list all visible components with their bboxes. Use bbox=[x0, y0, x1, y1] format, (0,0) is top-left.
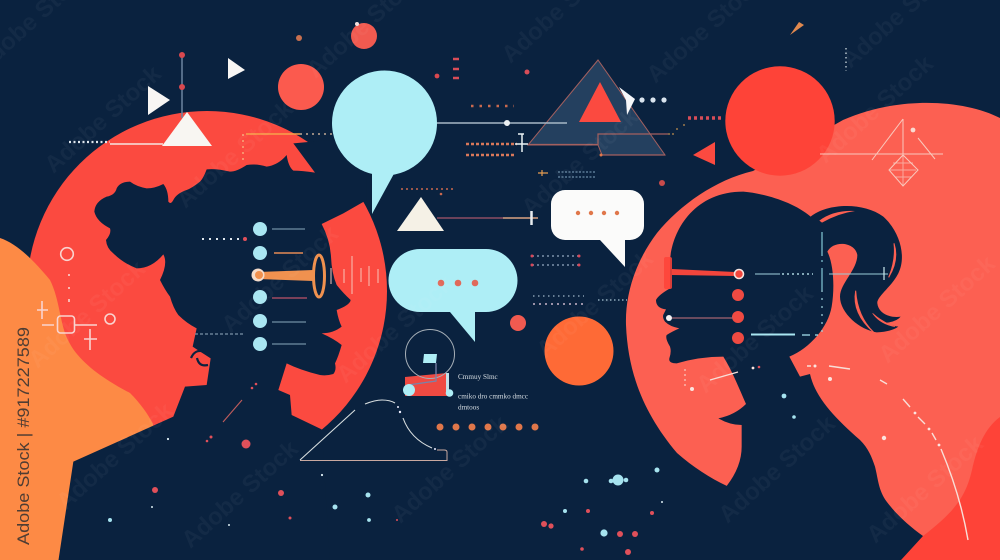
watermark: Adobe Stock repeated: Adobe Stock bbox=[713, 410, 841, 529]
left red circle bbox=[27, 111, 387, 471]
watermark: Adobe Stock repeated: Adobe Stock bbox=[873, 250, 1000, 369]
left ear crescent bbox=[191, 351, 208, 365]
dots beside triangle bbox=[639, 97, 667, 103]
panel: top triangle diagram bbox=[437, 59, 723, 186]
blue speech bubble bbox=[389, 249, 518, 342]
right coral shape bbox=[626, 103, 1000, 560]
panel: right figure bbox=[626, 66, 1000, 560]
watermark: Adobe Stock repeated: Adobe Stock bbox=[331, 270, 459, 389]
scattered star dots bbox=[108, 366, 796, 555]
bullet list with lines bbox=[253, 222, 307, 351]
vertical pin line bbox=[179, 52, 185, 118]
watermark: Adobe Stock repeated: Adobe Stock bbox=[531, 245, 659, 364]
watermark: Adobe Stock repeated: Adobe Stock bbox=[216, 220, 344, 339]
right head silhouette bbox=[656, 192, 923, 560]
panel: center chat bbox=[300, 189, 644, 460]
flag icon in ring bbox=[403, 330, 454, 397]
small white triangle with line bbox=[397, 197, 538, 231]
caption text: cmiko dro cmmko dmcc bbox=[458, 392, 528, 400]
dashed arc on shoulder bbox=[685, 364, 968, 540]
watermark: Adobe Stock repeated: Adobe Stock bbox=[861, 430, 989, 549]
watermark: Adobe Stock repeated: Adobe Stock bbox=[386, 410, 514, 529]
panel: top decorations left bbox=[148, 22, 439, 146]
inner red triangle bbox=[579, 82, 621, 122]
watermark: Adobe Stock repeated: Adobe Stock bbox=[691, 280, 819, 399]
left head silhouette bbox=[58, 137, 367, 560]
caption text: Cmmuy Slmc bbox=[458, 373, 498, 381]
left orange blob bbox=[0, 238, 153, 560]
small red circle bbox=[510, 315, 526, 331]
watermark: Adobe Stock repeated: Adobe Stock bbox=[811, 50, 939, 169]
glasses bar and dots bbox=[664, 257, 744, 344]
watermark: Adobe Stock repeated: Adobe Stock bbox=[171, 95, 299, 214]
circuit lines bbox=[437, 59, 723, 177]
right red lower blob bbox=[898, 417, 1000, 560]
red circles bbox=[278, 22, 439, 110]
watermark: Adobe Stock repeated: Adobe Stock bbox=[516, 103, 644, 222]
watermark: Adobe Stock repeated: Adobe Stock bbox=[39, 60, 167, 179]
right geometric drawing bbox=[820, 119, 943, 186]
ponytail highlights bbox=[819, 211, 896, 333]
mountain line chart bbox=[300, 400, 447, 460]
watermark: Adobe Stock repeated: Adobe Stock bbox=[23, 255, 151, 374]
watermark: Adobe Stock repeated: Adobe Stock bbox=[51, 397, 179, 516]
orange circle bbox=[544, 316, 614, 386]
orange shard bbox=[790, 22, 804, 35]
right big red circle bbox=[725, 66, 835, 176]
dotted connector rows bbox=[69, 134, 333, 422]
white triangles bbox=[148, 58, 245, 115]
left tech glyphs bbox=[37, 248, 115, 350]
watermark: Adobe Stock repeated: Adobe Stock bbox=[176, 435, 304, 554]
orange dots row bbox=[436, 424, 538, 430]
panel: top right marks bbox=[790, 22, 846, 71]
panel: left figure bbox=[0, 111, 387, 560]
outlined dark triangle bbox=[528, 60, 665, 155]
caption text: dmtoos bbox=[458, 404, 479, 412]
white speech bubble bbox=[551, 190, 644, 267]
dotted vertical bbox=[845, 48, 847, 71]
dotted rows bbox=[401, 189, 627, 304]
speech bubble: large blue bbox=[332, 70, 437, 214]
caption text bbox=[458, 373, 528, 412]
white shard bbox=[619, 87, 635, 115]
horn and soundwaves bbox=[252, 255, 378, 297]
vertical stock id text: Adobe Stock | #917227589 bbox=[14, 327, 33, 545]
head measurement lines bbox=[751, 232, 888, 335]
red arrow triangle bbox=[693, 142, 715, 165]
white triangle on circle bbox=[162, 112, 212, 146]
